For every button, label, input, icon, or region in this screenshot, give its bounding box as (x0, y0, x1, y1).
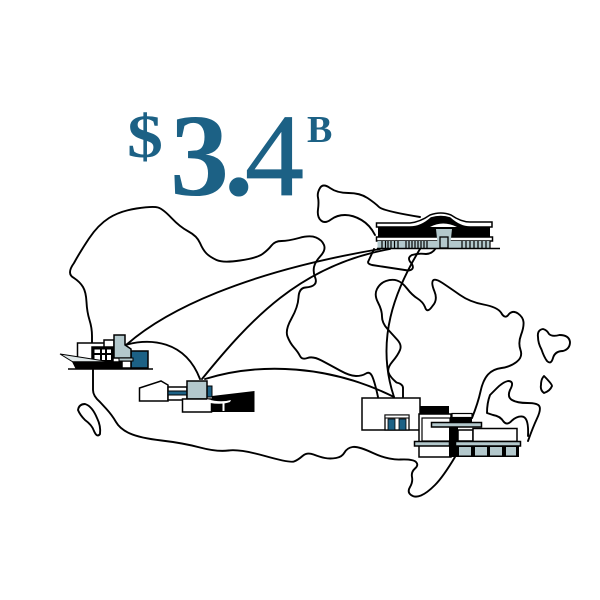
title: 3.4 billion dollars (127, 90, 332, 221)
title: 3.4 billion dollars: 4 (245, 90, 304, 221)
connection arcs between buildings (125, 249, 420, 397)
building: prairie complex (140, 381, 254, 412)
title: 3.4 billion dollars: B (307, 109, 332, 151)
building: eastern complex (362, 398, 520, 457)
title: 3.4 billion dollars: 3 (170, 90, 229, 221)
building: northern terminal (376, 213, 500, 248)
title: 3.4 billion dollars: $ (127, 104, 163, 171)
building: west coast waterfront (60, 335, 153, 369)
title: 3.4 billion dollars: . (224, 90, 254, 221)
map of Canada outline (70, 186, 570, 497)
